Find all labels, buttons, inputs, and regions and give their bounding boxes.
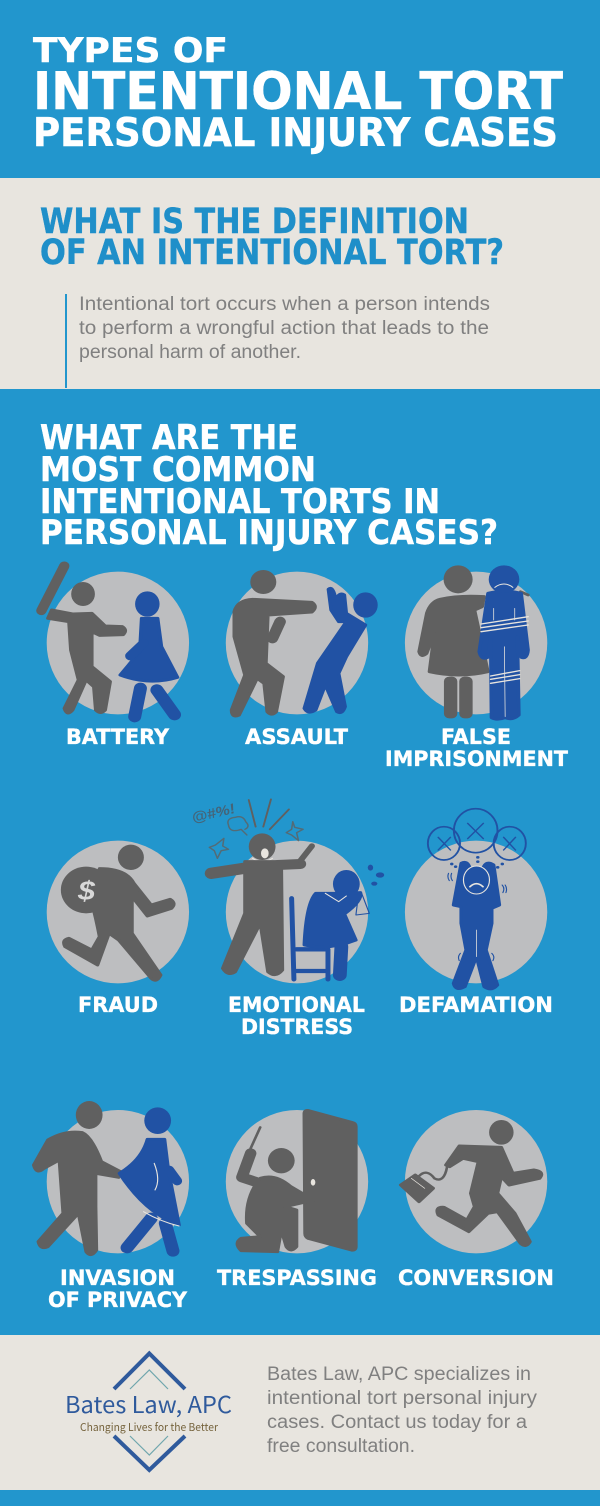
definition text: Intentional tort occurs when a person intends <box>79 294 490 315</box>
definition heading: OF AN INTENTIONAL TORT? <box>40 233 504 273</box>
label: invasion of privacy: INVASION <box>60 1266 175 1290</box>
label: defamation: DEFAMATION <box>399 993 553 1017</box>
label: emotional distress <box>228 993 365 1039</box>
section heading: MOST COMMON <box>40 450 316 490</box>
icon: trespassing <box>226 1110 368 1253</box>
definition heading: WHAT IS THE DEFINITION <box>40 202 469 242</box>
icon: emotional distress: @#%! <box>190 801 237 826</box>
icon: fraud <box>47 841 189 983</box>
footer text <box>267 1364 538 1457</box>
section heading <box>40 418 498 553</box>
label: conversion: CONVERSION <box>398 1266 554 1290</box>
label: false imprisonment <box>385 725 569 771</box>
icon: false imprisonment <box>405 565 547 719</box>
section heading: INTENTIONAL TORTS IN <box>40 482 440 522</box>
label: assault: ASSAULT <box>245 725 349 749</box>
label: emotional distress: EMOTIONAL <box>228 993 365 1017</box>
definition text: to perform a wrongful action that leads to the <box>79 318 489 339</box>
label: trespassing: TRESPASSING <box>217 1266 377 1290</box>
footer text: intentional tort personal injury <box>267 1388 538 1409</box>
definition heading <box>40 202 504 273</box>
logo <box>65 1354 232 1470</box>
title: PERSONAL INJURY CASES <box>33 111 558 156</box>
footer text: cases. Contact us today for a <box>267 1412 527 1433</box>
definition text: personal harm of another. <box>79 342 301 363</box>
icon: assault <box>226 570 378 716</box>
panel: definition <box>0 178 600 389</box>
label: battery: BATTERY <box>66 725 170 749</box>
section heading: WHAT ARE THE <box>40 418 298 458</box>
icon: invasion of privacy <box>34 1101 189 1255</box>
footer text: free consultation. <box>267 1436 415 1457</box>
icon: conversion <box>401 1110 547 1253</box>
definition text <box>79 294 490 363</box>
logo: Changing Lives for the Better <box>80 1419 219 1435</box>
label: emotional distress: DISTRESS <box>241 1015 353 1039</box>
label: invasion of privacy <box>48 1266 188 1312</box>
footer text: Bates Law, APC specializes in <box>267 1364 531 1385</box>
icon: battery <box>41 566 189 717</box>
label: false imprisonment: IMPRISONMENT <box>385 747 569 771</box>
icon: emotional distress <box>190 799 384 983</box>
panel: footer <box>0 1335 600 1490</box>
icon: defamation <box>405 809 547 989</box>
label: false imprisonment: FALSE <box>441 725 511 749</box>
title <box>33 31 563 156</box>
title: INTENTIONAL TORT <box>33 62 563 122</box>
label: invasion of privacy: OF PRIVACY <box>48 1288 188 1312</box>
logo: Bates Law, APC <box>65 1386 232 1420</box>
icon: fraud: $ <box>77 877 96 906</box>
section heading: PERSONAL INJURY CASES? <box>40 513 498 553</box>
title: TYPES OF <box>33 31 228 71</box>
label: fraud: FRAUD <box>78 993 158 1017</box>
